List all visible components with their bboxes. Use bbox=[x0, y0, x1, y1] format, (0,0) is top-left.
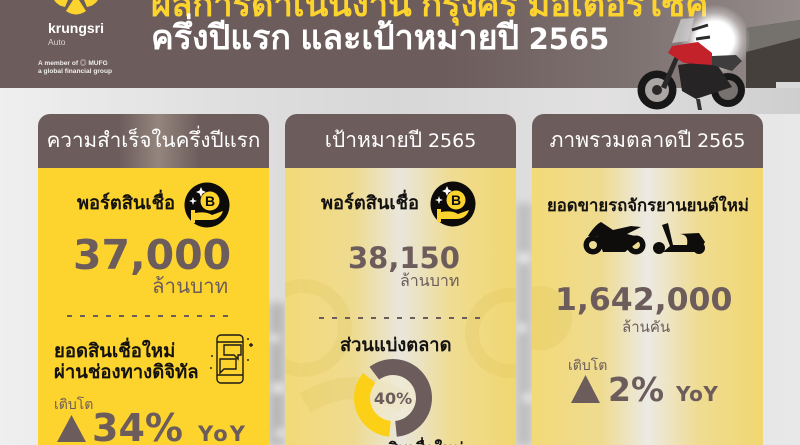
panel heading: ความสำเร็จในครึ่งปีแรก bbox=[47, 129, 260, 152]
panel: first-half achievements bbox=[38, 114, 269, 445]
value: 2% YoY: 2% bbox=[608, 370, 664, 409]
unit: ล้านบาท bbox=[400, 273, 459, 290]
panel body bbox=[38, 168, 269, 445]
panel heading bbox=[38, 114, 269, 168]
icon: hand with baht coin bbox=[184, 182, 230, 228]
panel body bbox=[285, 168, 516, 445]
value: 1,642,000: 1,642,000 bbox=[555, 282, 732, 318]
icon: up triangle bbox=[57, 415, 86, 442]
panel heading bbox=[532, 114, 763, 168]
new motorcycle sales label: ยอดขายรถจักรยานยนต์ใหม่ bbox=[547, 196, 749, 215]
logo wordmark: krungsri bbox=[48, 20, 104, 36]
icon: hand with baht coin: B bbox=[205, 193, 215, 209]
digital channel label: ยอดสินเชื่อใหม่ bbox=[54, 340, 175, 361]
background: faded wheel shapes bbox=[285, 279, 502, 412]
icon: phone with chat bubbles bbox=[210, 334, 253, 384]
panel: 2565 targets bbox=[285, 114, 516, 445]
glow bbox=[680, 5, 750, 75]
growth label: เติบโต bbox=[568, 357, 607, 373]
MUFG member line: a global financial group bbox=[38, 68, 112, 75]
icon: krungsri emblem bbox=[54, 0, 98, 14]
donut value: 40% bbox=[374, 389, 412, 408]
market share label: ส่วนแบ่งตลาด bbox=[340, 334, 451, 355]
unit: ล้านบาท bbox=[152, 275, 228, 298]
panel: 2565 market overview bbox=[532, 114, 763, 445]
donut chart: 40% bbox=[354, 359, 432, 437]
title line 2: ครึ่งปีแรก และเป้าหมายปี 2565 bbox=[151, 19, 609, 57]
panel body bbox=[532, 168, 763, 445]
logo subtitle: Auto bbox=[48, 37, 66, 47]
icon: hand with baht coin: B bbox=[451, 192, 461, 208]
unit: ล้านคัน bbox=[622, 319, 670, 336]
header banner bbox=[0, 0, 800, 88]
MUFG member line bbox=[38, 59, 112, 75]
ground strip bbox=[600, 88, 800, 114]
icon: up triangle bbox=[571, 375, 600, 403]
panel heading: เป้าหมายปี 2565 bbox=[325, 129, 476, 152]
loan portfolio label: พอร์ตสินเชื่อ bbox=[321, 192, 419, 213]
background: faded wheel shape bbox=[532, 286, 572, 350]
digital channel label bbox=[54, 338, 199, 382]
icon: sport motorcycle and scooter bbox=[584, 222, 705, 254]
photo: cafe building bbox=[746, 20, 800, 88]
panel heading: ภาพรวมตลาดปี 2565 bbox=[550, 129, 745, 152]
panel body: YoY bbox=[676, 382, 718, 406]
value: 37,000: 37,000 bbox=[73, 231, 231, 279]
photo: motorcycle bbox=[638, 18, 745, 110]
logo: krungsri Auto bbox=[48, 0, 104, 47]
MUFG member line: A member of ◎ MUFG bbox=[38, 60, 108, 67]
growth label: เติบโต bbox=[54, 396, 93, 412]
panel heading bbox=[285, 114, 516, 168]
icon: hand with baht coin bbox=[430, 182, 476, 226]
digital channel label: ผ่านช่องทางดิจิทัล bbox=[54, 361, 199, 382]
value: 38,150: 38,150 bbox=[348, 241, 460, 275]
loan portfolio label: พอร์ตสินเชื่อ bbox=[77, 192, 175, 213]
